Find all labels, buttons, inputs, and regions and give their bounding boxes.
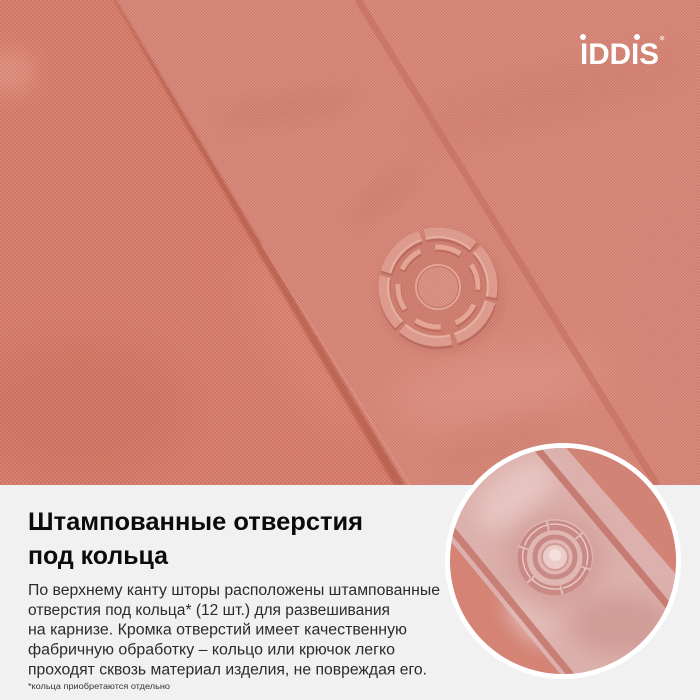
right fabric band xyxy=(100,0,700,485)
panel: text background xyxy=(0,485,700,700)
heading: Штампованные отверстия xyxy=(28,508,363,536)
inner ring segments xyxy=(395,244,482,332)
left fabric panel xyxy=(0,0,420,485)
body text: отверстия под кольца* (12 шт.) для развешивания xyxy=(28,602,390,619)
heading: под кольца xyxy=(28,542,169,570)
stamped ring xyxy=(378,228,504,354)
panel: curtain fabric photo xyxy=(0,0,700,485)
body text: на карнизе. Кромка отверстий имеет качественную xyxy=(28,622,407,638)
body text: По верхнему канту шторы расположены штампованные xyxy=(28,582,440,599)
inset ring xyxy=(517,519,593,596)
fold shadow xyxy=(114,0,405,485)
heading xyxy=(28,508,363,570)
body text: фабричную обработку – кольцо или крючок легко xyxy=(28,642,395,658)
inset pale band xyxy=(452,448,676,674)
inset circle: close-up of ring xyxy=(445,443,681,679)
inset right fabric xyxy=(568,448,676,566)
fold highlight xyxy=(262,245,410,485)
footnote: *кольца приобретаются отдельно xyxy=(28,681,170,691)
logo: iDDiS: IDDIS xyxy=(580,38,659,71)
outer ring segments xyxy=(378,228,498,350)
hole ring xyxy=(416,265,460,309)
inset seams xyxy=(535,450,668,608)
seam line xyxy=(358,0,657,485)
body text xyxy=(28,582,440,678)
body text: проходят сквозь материал изделия, не повреждая его. xyxy=(28,662,427,678)
